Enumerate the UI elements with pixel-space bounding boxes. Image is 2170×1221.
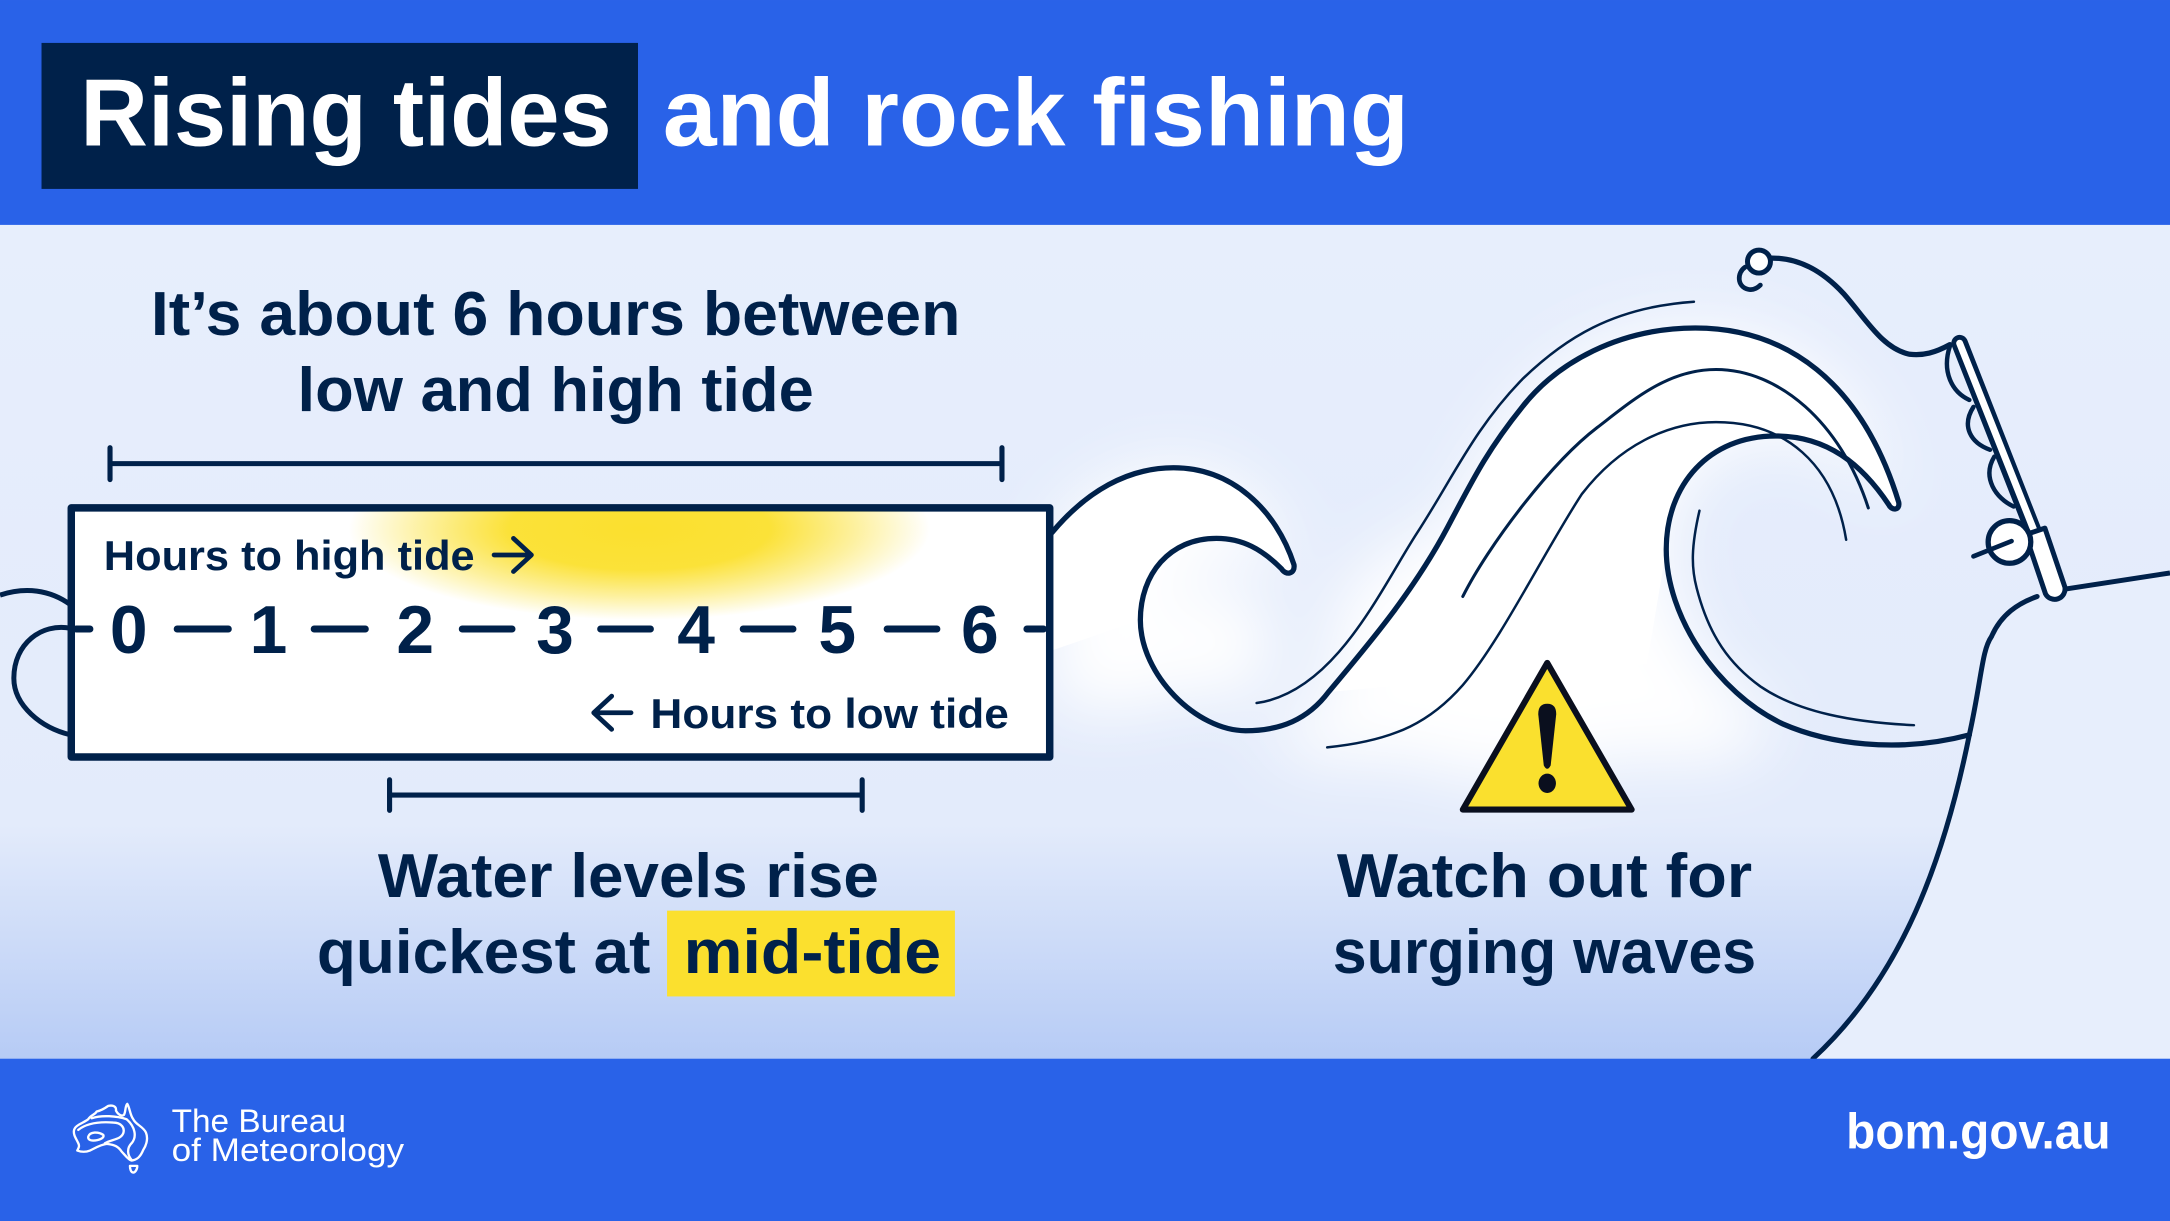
chart frame (71, 508, 1050, 757)
digits: 2 (396, 593, 434, 668)
icon: fishing rod (1739, 250, 2065, 599)
header band (0, 0, 2170, 225)
dashes (76, 627, 1043, 632)
logo text (172, 1103, 405, 1168)
footer band (0, 1059, 2170, 1221)
heading: water levels rise quickest: quickest at (317, 918, 650, 987)
bracket: 6 hours span (110, 448, 1002, 480)
digits: 3 (536, 593, 574, 668)
fishing line and hook (1770, 258, 1950, 355)
digits: 6 (961, 593, 999, 668)
label: hours to low tide: Hours to low tide (650, 690, 1009, 737)
title: and rock fishing (663, 60, 1409, 166)
mid-tide yellow highlight (355, 511, 924, 618)
background: sea gradient (0, 221, 2170, 1060)
heading: about 6 hours: It’s about 6 hours between (151, 280, 960, 349)
label: hours to high tide: Hours to high tide (104, 532, 475, 579)
logo text: The Bureau (172, 1103, 346, 1139)
heading: water levels rise quickest: Water levels rise (378, 842, 879, 911)
digits: 5 (818, 593, 856, 668)
heading: watch out for surging waves (1333, 842, 1756, 987)
rod shaft (1960, 343, 2033, 530)
hours scale (76, 593, 1043, 668)
digits: 0 (110, 593, 148, 668)
illustration: rock edge (1813, 596, 2037, 1059)
logo: Australia map (74, 1104, 147, 1173)
heading: water levels rise quickest (317, 842, 955, 996)
illustration: wave at left edge (0, 590, 71, 735)
heading: about 6 hours: low and high tide (298, 356, 814, 425)
white glow behind wave (1055, 328, 1899, 782)
logo text: of Meteorology (172, 1132, 405, 1168)
title (42, 43, 1409, 189)
illustration: surging wave (1052, 302, 1969, 747)
panel: rock with fishing spot (1813, 573, 2170, 1060)
heading: watch out for surging waves: surging waves (1333, 918, 1756, 987)
panel: tide chart (71, 508, 1050, 757)
bracket: mid-tide span (390, 780, 862, 810)
icon: warning triangle (1463, 663, 1632, 810)
title highlight box (42, 43, 638, 189)
heading: about 6 hours (151, 280, 960, 425)
arrow left (594, 696, 631, 729)
arrow right (494, 538, 531, 572)
illustration: rock ledge line (2062, 573, 2170, 590)
digits: 4 (677, 593, 715, 668)
heading: water levels rise quickest: mid-tide (684, 918, 941, 987)
heading: watch out for surging waves: Watch out for (1337, 842, 1752, 911)
highlight: mid-tide (667, 911, 955, 996)
digits: 1 (250, 593, 287, 668)
digits (110, 593, 999, 668)
website url: bom.gov.au (1846, 1104, 2110, 1160)
wave crest fill (1329, 328, 1899, 692)
rod handle (2026, 528, 2065, 599)
reel (1988, 521, 2031, 563)
line loops under rod (1947, 346, 2014, 507)
title: Rising tides (80, 60, 612, 166)
